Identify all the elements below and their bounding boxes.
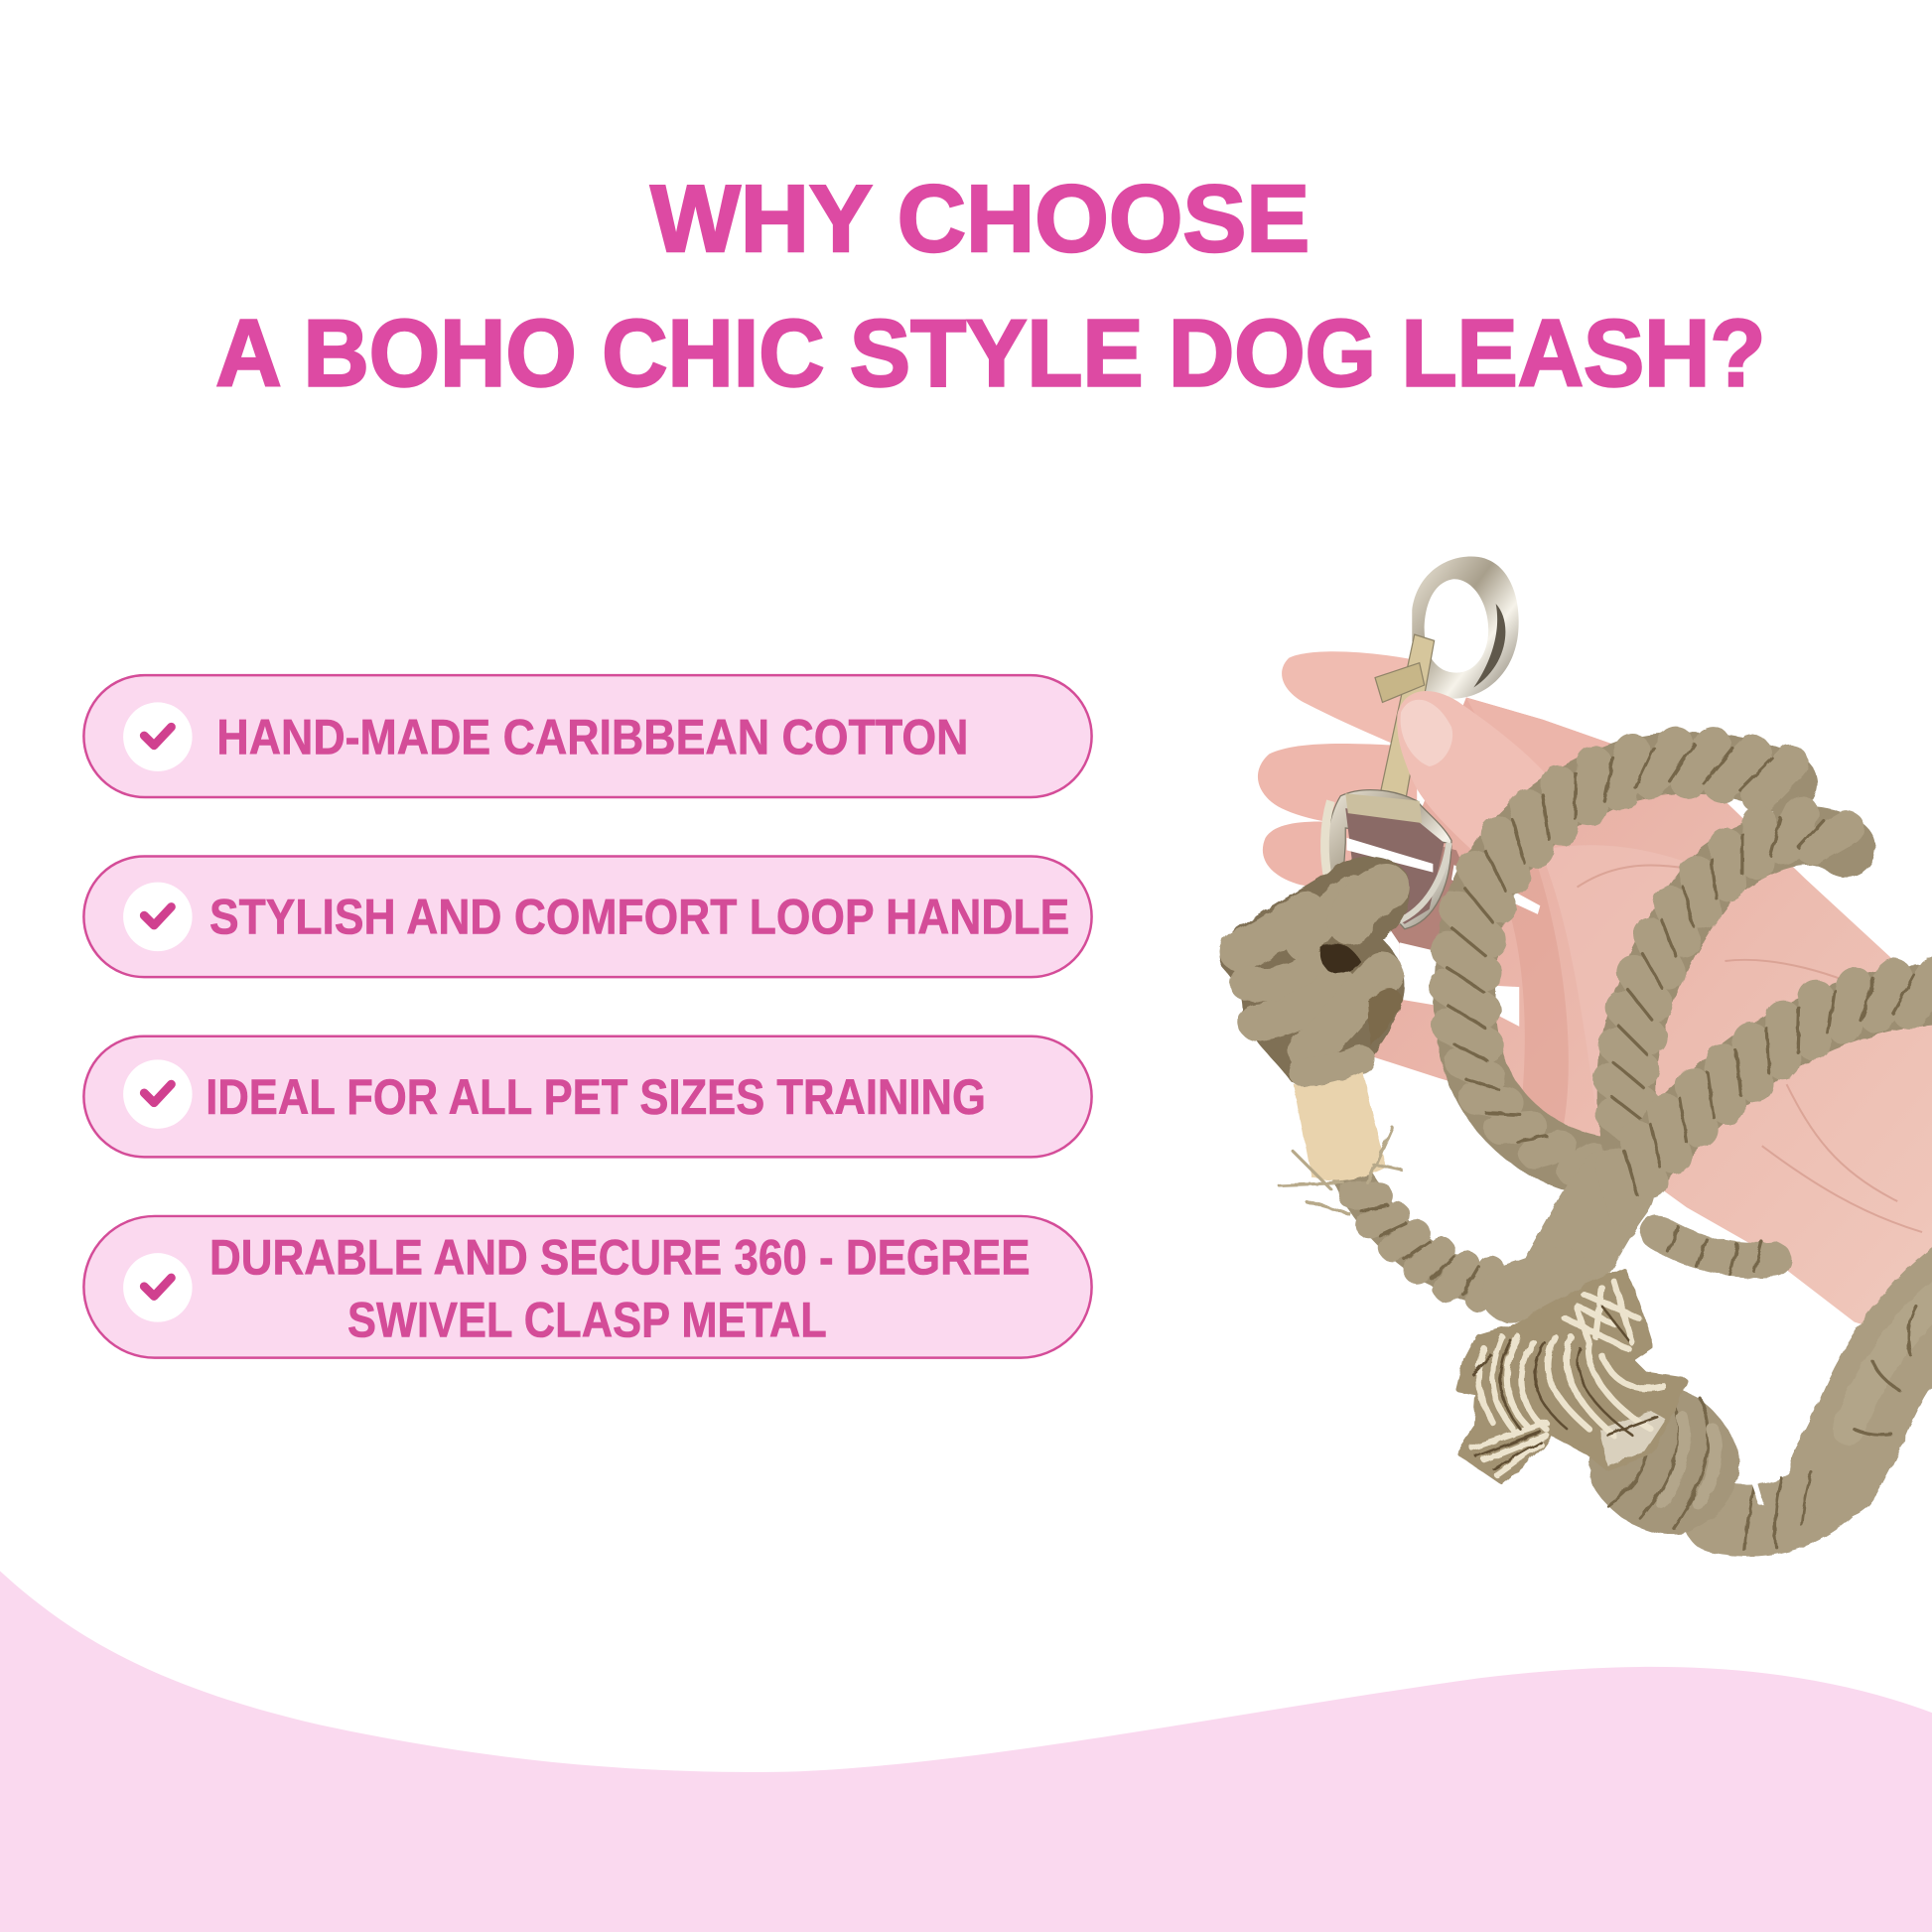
title: WHY CHOOSE: [650, 166, 1310, 272]
hand behind the leash: [1258, 651, 1932, 1345]
leash and hand illustration: [1220, 557, 1932, 1550]
feature pill: all pet sizes: IDEAL FOR ALL PET SIZES TRAINING: [206, 1069, 986, 1125]
loose fibres at wrap: [1279, 1128, 1402, 1213]
rope C foreground: [1509, 975, 1932, 1294]
rope loop B: [1610, 813, 1847, 1144]
feature pill: loop handle: STYLISH AND COMFORT LOOP HANDLE: [209, 890, 1069, 945]
feature pill: hand-made cotton: HAND-MADE CARIBBEAN COTTON: [216, 710, 968, 765]
feature pill: swivel clasp: DURABLE AND SECURE 360 - DEGREE: [209, 1229, 1031, 1285]
frayed rope end: [1458, 1271, 1685, 1482]
title: [215, 166, 1765, 406]
thumb: [1397, 691, 1560, 854]
cotton rope strands: [1220, 745, 1932, 1550]
cream binding wrap: [1294, 1072, 1386, 1181]
feature pill: hand-made cotton: [83, 675, 1092, 797]
metal swivel clasp: [1324, 557, 1519, 929]
feature pill: swivel clasp: [83, 1216, 1092, 1358]
title: A BOHO CHIC STYLE DOG LEASH?: [215, 300, 1765, 406]
rope segment behind palm: [1657, 1227, 1774, 1274]
rope C tail towards wrap: [1351, 1176, 1509, 1299]
feature pill: loop handle: [83, 857, 1092, 977]
rope knot near clasp: [1220, 856, 1410, 1086]
rope D bottom right: [1719, 1269, 1932, 1550]
bottom pink wave: [0, 1571, 1932, 1932]
rope loop A: [1447, 745, 1790, 1171]
rope knot lower: [1588, 1385, 1764, 1535]
feature pill: swivel clasp: SWIVEL CLASP METAL: [347, 1293, 827, 1348]
feature pill: all pet sizes: [83, 1036, 1092, 1157]
